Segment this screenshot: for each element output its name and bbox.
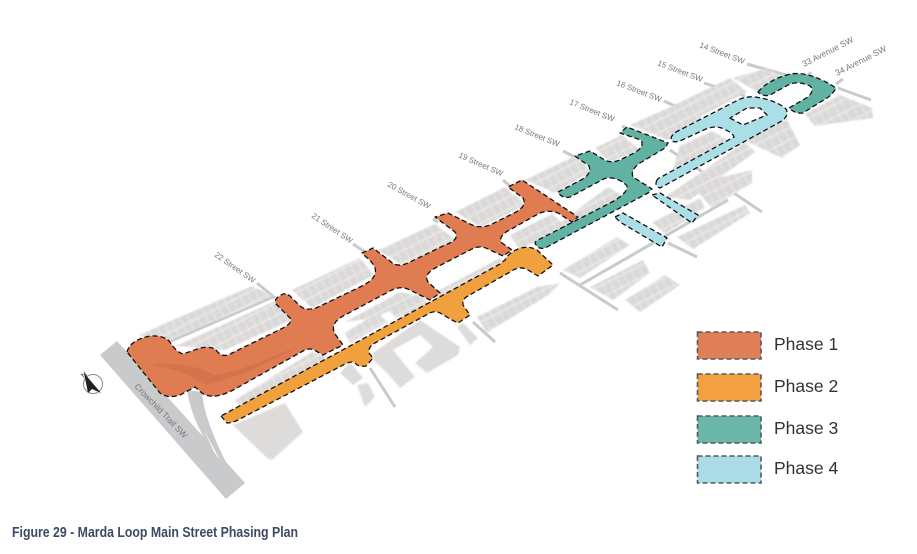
Phase 2 zone (221, 247, 553, 423)
legend: Phase 3 (698, 416, 838, 443)
legend: Phase 1: Phase 1 (774, 334, 838, 354)
buildings (138, 68, 873, 460)
Phase 1 zone (127, 180, 578, 397)
figure caption: Figure 29 - Marda Loop Main Street Phasing Plan (12, 524, 298, 541)
legend: Phase 3: Phase 3 (774, 418, 838, 438)
Phase 3 zone: north loop (758, 74, 836, 113)
legend: Phase 4 (698, 456, 838, 483)
street labels (133, 34, 888, 440)
street labels: 21 Street SW (310, 211, 355, 246)
icon: north compass: N (80, 371, 89, 380)
legend: Phase 2 (698, 374, 838, 401)
legend: Phase 2: Phase 2 (774, 376, 838, 396)
street labels: Crowchild Trail SW (133, 381, 190, 440)
street labels: 14 Street SW (698, 40, 746, 66)
street labels: 18 Street SW (513, 123, 561, 149)
street lines (171, 64, 871, 407)
street labels: 17 Street SW (568, 98, 616, 124)
street labels: 22 Street SW (213, 250, 257, 285)
street labels: 16 Street SW (615, 78, 663, 104)
street labels: 34 Avenue SW (833, 43, 888, 78)
legend: Phase 1 (698, 332, 838, 359)
icon: north compass (80, 371, 102, 394)
street labels: 33 Avenue SW (800, 34, 855, 69)
Phase 4 zone: 16 Street segment (652, 193, 698, 223)
street labels: 15 Street SW (656, 58, 704, 84)
street labels: 19 Street SW (457, 151, 505, 178)
road: Crowchild Trail (100, 341, 245, 499)
Phase 3 zone (535, 127, 668, 248)
legend: Phase 4: Phase 4 (774, 458, 838, 478)
legend (698, 332, 838, 483)
street labels: 20 Street SW (386, 180, 432, 211)
Phase 4 zone: 17 Street segment (615, 213, 667, 247)
Phase 4 zone: main loop (656, 97, 787, 188)
